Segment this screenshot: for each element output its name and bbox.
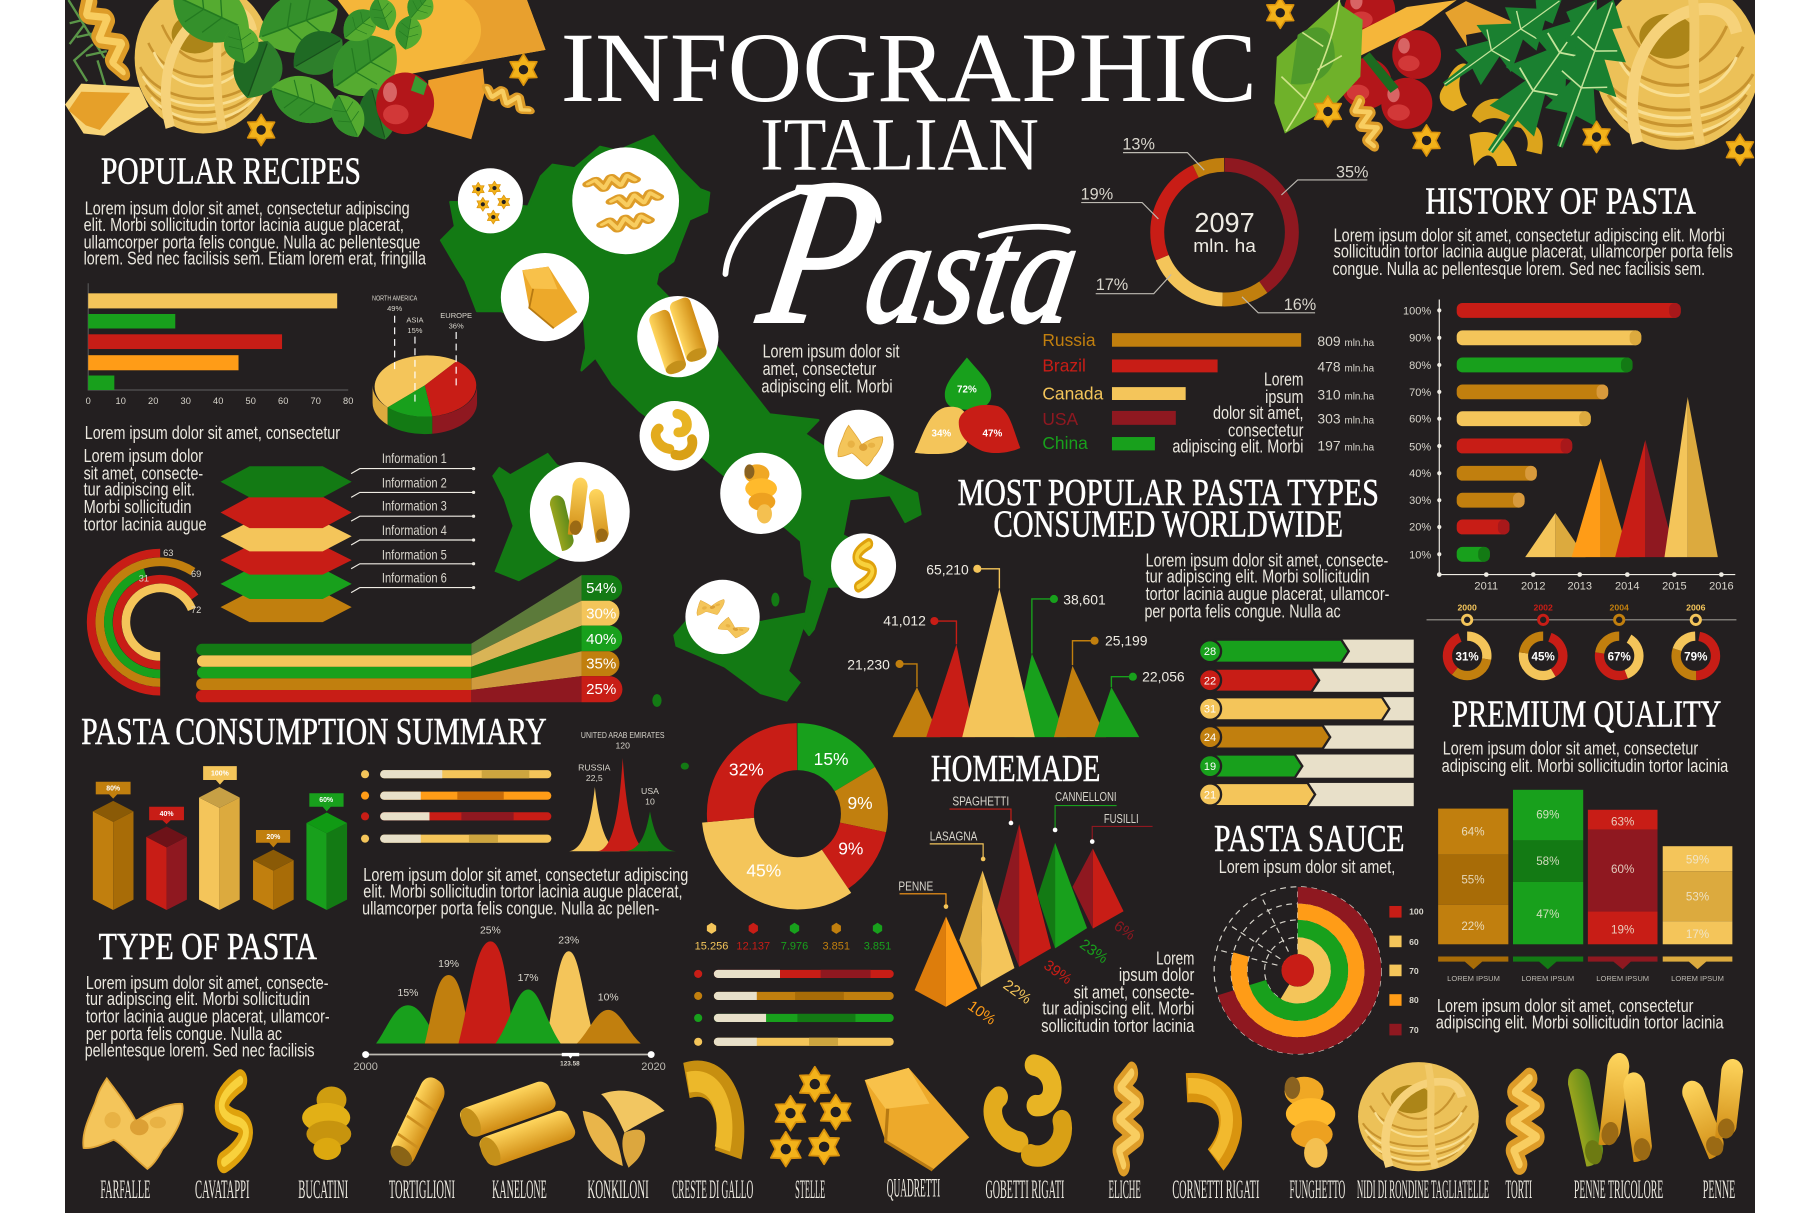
- row: pasta types with names: CAVATAPPI: [195, 1174, 250, 1204]
- item: kanelone: KANELONE: [492, 1174, 547, 1204]
- chart: arrow progress bars: 21: [1204, 790, 1216, 802]
- chart: mountain peaks: 38,601: [1063, 592, 1106, 608]
- chart: three leaves: 47%: [983, 428, 1003, 439]
- text: most popular body: tur adipiscing elit. Morbi sollicitudin: [1146, 566, 1370, 587]
- row: pasta types with names: FUNGHETTO: [1290, 1174, 1345, 1204]
- chart: country bars: 197 mln.ha: [1317, 437, 1375, 453]
- chart: country bars: dolor sit amet,: [1213, 402, 1303, 423]
- text: left column: tortor lacinia augue: [84, 513, 207, 534]
- heading: pasta consumption summary: PASTA CONSUMPTION SUMMARY: [81, 711, 547, 753]
- text: type of pasta body: tortor lacinia augue placerat, ullamcor-: [86, 1006, 330, 1027]
- title: Pasta script: Pasta: [746, 138, 1099, 367]
- chart: pyramids: LASAGNA: [930, 828, 978, 843]
- heading: most popular pasta types: MOST POPULAR PASTA TYPES: [958, 472, 1379, 514]
- chart: stripes to percent tabs: 30%: [586, 606, 616, 623]
- chart: big donut: 45%: [746, 860, 781, 880]
- chart: radial sauce: 70: [1409, 966, 1419, 976]
- chart: 3D pie: 15%: [407, 326, 423, 335]
- item: penne tricolore: [1565, 1049, 1663, 1204]
- heading: homemade: HOMEMADE: [931, 748, 1100, 790]
- chart: spike peaks: 120: [615, 741, 630, 751]
- circle: farfalle: [824, 410, 894, 479]
- text: history body: [1332, 224, 1733, 279]
- list: information labels: [351, 450, 475, 593]
- legend: hex dots and values: [695, 923, 891, 953]
- item: creste di gallo: [672, 1079, 753, 1204]
- chart: 3D pie: EUROPE: [440, 311, 472, 320]
- chart: stacked columns: LOREM IPSUM: [1596, 974, 1649, 983]
- chart: arrow progress bars: [1199, 640, 1414, 806]
- chart: stacked columns: 63%: [1611, 815, 1634, 828]
- chart: pyramids: PENNE: [898, 878, 933, 893]
- chart: stripes to percent tabs: 35%: [586, 656, 616, 673]
- item: stelle: STELLE: [795, 1174, 825, 1204]
- chart: 3D columns with tags: [93, 766, 347, 910]
- chart: mountain peaks: [847, 562, 1185, 737]
- legend: hex dots and values: 12.137: [736, 941, 770, 953]
- bar chart: recipes: 80: [343, 396, 353, 406]
- chart: history bars: 60%: [1409, 414, 1431, 426]
- chart: 2097 ring: 13%: [1122, 136, 1155, 154]
- text: consumption body: [362, 864, 688, 919]
- title: INFOGRAPHIC: INFOGRAPHIC: [561, 12, 1257, 123]
- chart: mountain peaks: 21,230: [847, 657, 890, 673]
- chart: pyramids: 10%: [964, 998, 999, 1029]
- item: eliche: [1108, 1073, 1141, 1204]
- chart: stacked columns: [1438, 790, 1732, 983]
- title: ITALIAN: ITALIAN: [760, 103, 1039, 186]
- chart: bell curves with timeline: 25%: [480, 925, 501, 936]
- text: under pasta: adipiscing elit. Morbi: [761, 375, 893, 396]
- heading: premium quality: PREMIUM QUALITY: [1452, 694, 1721, 736]
- item: penne: [1678, 1055, 1755, 1204]
- chart: 2097 ring: 16%: [1284, 296, 1316, 314]
- chart: spike peaks: 10: [645, 796, 655, 806]
- chart: year ring row: 79%: [1684, 650, 1707, 663]
- text: left column: Lorem ipsum dolor: [84, 445, 203, 466]
- chart: spike peaks: [568, 730, 678, 851]
- chart: year ring row: 67%: [1608, 650, 1631, 663]
- text: popular recipes body: ullamcorper porta felis congue. Nulla ac pellentesque: [84, 231, 420, 252]
- chart: history bars: 10%: [1409, 549, 1431, 561]
- chart: mountain peaks: 65,210: [926, 562, 969, 578]
- bar chart: recipes: 10: [116, 396, 126, 406]
- chart: bell curves with timeline: 2000: [353, 1061, 378, 1073]
- chart: three leaves: 72%: [957, 384, 977, 395]
- chart: stacked columns: LOREM IPSUM: [1671, 974, 1724, 983]
- bar chart: recipes: 0: [86, 396, 91, 406]
- chart: big donut: 32%: [729, 759, 764, 779]
- bar chart: recipes: 70: [311, 396, 321, 406]
- row: pasta types with names: CRESTE DI GALLO: [672, 1174, 753, 1204]
- item: penne: PENNE: [1703, 1174, 1735, 1204]
- legend: hex dots and values: 3.851: [864, 941, 891, 953]
- chart: year ring row: 2004: [1610, 603, 1629, 613]
- text: most popular body: Lorem ipsum dolor sit amet, consecte-: [1146, 549, 1388, 570]
- chart: history bars: 2011: [1474, 581, 1498, 593]
- chart: history bars: 2016: [1709, 581, 1734, 593]
- circle: kanelone: [637, 294, 718, 378]
- chart: stacked columns: 69%: [1536, 808, 1559, 821]
- chart: progress lines lower: [694, 970, 894, 1046]
- bar chart: recipes: 20: [148, 396, 158, 406]
- chart: history bars: 2013: [1567, 581, 1592, 593]
- chart: radial sauce: 70: [1409, 1025, 1419, 1035]
- chart: 3D pie: 36%: [449, 321, 464, 330]
- chart: history bars: 2015: [1662, 581, 1687, 593]
- heading: popular recipes: POPULAR RECIPES: [101, 150, 361, 192]
- legend: hex dots and values: 7.976: [781, 941, 808, 953]
- chart: country bars: Russia: [1042, 330, 1096, 350]
- item: quadretti: QUADRETTI: [887, 1173, 940, 1203]
- text: homemade body: ipsum dolor: [1119, 964, 1194, 985]
- chart: pyramids: [898, 789, 1153, 1029]
- chart: stacked columns: 60%: [1611, 863, 1634, 876]
- chart: bell curves with timeline: 2020: [641, 1061, 666, 1073]
- chart: stacked columns: 58%: [1536, 855, 1559, 868]
- map: Italy with pasta circles: [441, 136, 920, 770]
- chart: spike peaks: USA: [641, 786, 659, 796]
- chart: 3D pie: 49%: [387, 304, 402, 313]
- item: cavatappi: [195, 1080, 250, 1204]
- list: information labels: Information 1: [382, 450, 447, 466]
- text: homemade body: sollicitudin tortor lacinia: [1041, 1015, 1195, 1036]
- text: consumption body: elit. Morbi sollicitudin tortor lacinia augue placerat,: [363, 880, 682, 901]
- text: premium body: adipiscing elit. Morbi sollicitudin tortor lacinia: [1442, 755, 1729, 776]
- chart: stacked columns: 59%: [1686, 854, 1709, 867]
- circle: farfalle pair: [685, 580, 760, 654]
- chart: year ring row: 2002: [1534, 603, 1553, 613]
- chart: history bars: 2014: [1615, 581, 1640, 593]
- chart: pyramids: FUSILLI: [1104, 811, 1139, 826]
- chart: rainbow arcs: [91, 548, 201, 691]
- chart: three leaves: 34%: [931, 428, 951, 439]
- heading: most popular pasta types: CONSUMED WORLDWIDE: [994, 503, 1343, 545]
- chart: hexagon stack: [221, 466, 352, 622]
- chart: rainbow arcs: 69: [191, 569, 201, 579]
- chart: bell curves with timeline: 23%: [558, 936, 579, 947]
- row: pasta types with names: BUCATINI: [298, 1174, 348, 1204]
- chart: bell curves with timeline: 15%: [398, 988, 418, 999]
- chart: arrow progress bars: 22: [1204, 675, 1216, 687]
- chart: pyramids: SPAGHETTI: [952, 794, 1009, 809]
- heading: pasta sauce: PASTA SAUCE: [1214, 818, 1404, 860]
- chart: pyramids: CANNELLONI: [1055, 789, 1117, 804]
- text: most popular body: per porta felis congue. Nulla ac: [1144, 601, 1341, 622]
- text: under pasta: Lorem ipsum dolor sit: [763, 341, 900, 362]
- chart: year ring row: 45%: [1532, 650, 1555, 663]
- text: premium footer: adipiscing elit. Morbi sollicitudin tortor lacinia: [1436, 1011, 1724, 1032]
- chart: country bars: 310 mln.ha: [1317, 386, 1375, 402]
- bar chart: recipes: 50: [246, 396, 256, 406]
- chart: history bars: 30%: [1409, 495, 1431, 507]
- chart: history bars: [1403, 299, 1735, 593]
- text: type of pasta body: tur adipiscing elit. Morbi sollicitudin: [86, 988, 310, 1009]
- item: tortiglioni: [387, 1072, 455, 1204]
- text: homemade body: [1041, 948, 1195, 1036]
- chart: pyramids: 6%: [1111, 918, 1138, 944]
- text: type of pasta body: per porta felis congue. Nulla ac: [86, 1023, 282, 1044]
- chart: big donut: 9%: [838, 838, 863, 858]
- item: cornetti rigati: [1172, 1086, 1259, 1204]
- chart: stacked columns: 47%: [1536, 908, 1559, 921]
- chart: rainbow arcs: 72: [191, 605, 201, 615]
- text: under pasta: amet, consectetur: [763, 358, 876, 379]
- chart: bell curves with timeline: [353, 925, 666, 1073]
- chart: country bars: adipiscing elit. Morbi: [1172, 436, 1303, 457]
- chart: 2097 ring: 17%: [1096, 276, 1128, 294]
- decoration: top-right pasta and herbs: [1267, 0, 1760, 172]
- chart: pyramids: 22%: [1000, 977, 1034, 1008]
- chart: 3D columns with tags: 100%: [211, 770, 229, 777]
- chart: country bars: 478 mln.ha: [1317, 358, 1375, 374]
- row: pasta types with names: TORTIGLIONI: [389, 1174, 455, 1204]
- text: type of pasta body: pellentesque lorem. Sed nec facilisis: [85, 1039, 315, 1060]
- chart: progress lines upper: [361, 770, 551, 843]
- circle: penne tricolore: [530, 462, 630, 562]
- chart: 3D columns with tags: 60%: [319, 797, 333, 804]
- chart: spike peaks: UNITED ARAB EMIRATES: [581, 730, 665, 740]
- item: bucatini: [298, 1086, 351, 1204]
- row: pasta types with names: CORNETTI RIGATI: [1172, 1174, 1259, 1204]
- heading: type of pasta: TYPE OF PASTA: [99, 926, 317, 968]
- chart: history bars: 70%: [1409, 387, 1431, 399]
- chart: country bars: Canada: [1042, 383, 1104, 403]
- text: left column: Morbi sollicitudin: [84, 496, 192, 517]
- chart: arrow progress bars: 24: [1204, 732, 1216, 744]
- text: popular recipes body: lorem. Sed nec facilisis sem. Etiam lorem erat, fringilla: [84, 248, 426, 269]
- circle: fusilli: [572, 147, 679, 254]
- item: nidi di rondine tagliatelle: [1357, 1062, 1489, 1204]
- text: consumption body: Lorem ipsum dolor sit amet, consectetur adipiscing: [363, 864, 688, 885]
- text: type of pasta body: Lorem ipsum dolor sit amet, consecte-: [86, 972, 328, 993]
- circle: cavatappi: [831, 533, 896, 598]
- chart: 2097 ring: 2097: [1194, 207, 1255, 238]
- text: pasta sauce body: Lorem ipsum dolor sit amet,: [1219, 856, 1395, 877]
- chart: country bars: ipsum: [1265, 386, 1303, 407]
- chart: stacked columns: 17%: [1686, 928, 1709, 941]
- chart: 2097 ring: 35%: [1336, 164, 1369, 182]
- chart: year ring row: 2000: [1457, 603, 1477, 613]
- chart: 2097 ring: 19%: [1081, 186, 1113, 204]
- item: farfalle: [83, 1078, 183, 1204]
- item: farfalle: FARFALLE: [100, 1174, 150, 1204]
- chart: stacked columns: 55%: [1461, 873, 1485, 886]
- row: pasta types with names: PENNE TRICOLORE: [1574, 1174, 1663, 1204]
- chart: history bars: 20%: [1409, 521, 1431, 533]
- text: left column: sit amet, consecte-: [84, 462, 203, 483]
- text: homemade body: Lorem: [1156, 948, 1194, 969]
- chart: year ring row: [1427, 603, 1736, 676]
- text: premium body: [1442, 737, 1729, 776]
- chart: radial sauce: [1214, 887, 1424, 1054]
- text: popular recipes body: elit. Morbi sollicitudin tortor lacinia augue placerat,: [84, 214, 404, 235]
- chart: stacked columns: 64%: [1461, 826, 1485, 839]
- chart: radial sauce: 80: [1409, 995, 1419, 1005]
- chart: stripes to percent tabs: 40%: [586, 631, 616, 648]
- text: history body: congue. Nulla ac pellentesque lorem. Sed nec facilisis sem.: [1332, 258, 1705, 279]
- text: consumption body: ullamcorper porta felis congue. Nulla ac pellen-: [362, 898, 659, 919]
- chart: history bars: 50%: [1409, 441, 1431, 453]
- chart: country bars: China: [1042, 433, 1088, 453]
- chart: country bars: consectetur: [1228, 419, 1303, 440]
- text: popular recipes body: Lorem ipsum dolor sit amet, consectetur adipiscing: [85, 198, 410, 219]
- chart: radial sauce: 60: [1409, 937, 1419, 947]
- legend: hex dots and values: 3.851: [823, 941, 850, 953]
- chart: 3D pie: NORTH AMERICA: [372, 294, 418, 303]
- chart: stripes to percent tabs: 25%: [586, 681, 616, 698]
- text: under pasta: [761, 341, 900, 396]
- list: information labels: Information 4: [382, 522, 447, 538]
- row: pasta types with names: [83, 1049, 1755, 1204]
- chart: bell curves with timeline: 123.58: [560, 1061, 580, 1068]
- chart: history bars: 90%: [1409, 332, 1431, 344]
- item: konkiloni: KONKILONI: [587, 1174, 649, 1204]
- chart: pyramids: 39%: [1040, 957, 1075, 988]
- row: pasta types with names: TORTI: [1505, 1174, 1532, 1204]
- chart: spike peaks: 22,5: [586, 773, 603, 783]
- chart: mountain peaks: 22,056: [1142, 668, 1185, 684]
- chart: arrow progress bars: 19: [1204, 761, 1216, 773]
- list: information labels: Information 2: [382, 475, 447, 491]
- chart: stripes to percent tabs: [196, 575, 622, 702]
- chart: country bars: Lorem: [1264, 368, 1303, 389]
- list: information labels: Information 5: [382, 546, 447, 562]
- text: left column: [84, 445, 207, 534]
- circle: quadretti: [501, 253, 589, 341]
- item: funghetto: [1285, 1077, 1345, 1204]
- chart: radial sauce: 100: [1409, 907, 1424, 917]
- item: kanelone: [456, 1077, 578, 1204]
- text: homemade body: tur adipiscing elit. Morbi: [1042, 998, 1194, 1019]
- text: left column: tur adipiscing elit.: [84, 479, 195, 500]
- chart: bell curves with timeline: 19%: [438, 959, 459, 970]
- bar chart: recipes: 40: [213, 396, 223, 406]
- chart: 3D columns with tags: 20%: [266, 834, 280, 841]
- row: pasta types with names: NIDI DI RONDINE TAGLIATELLE: [1357, 1174, 1489, 1204]
- list: information labels: Information 6: [382, 570, 447, 586]
- chart: bell curves with timeline: 10%: [598, 993, 619, 1004]
- text: type of pasta body: [85, 972, 330, 1060]
- text: premium footer: Lorem ipsum dolor sit amet, consectetur: [1437, 995, 1693, 1016]
- text: premium body: Lorem ipsum dolor sit amet, consectetur: [1443, 737, 1698, 758]
- chart: mountain peaks: 41,012: [883, 613, 926, 629]
- chart: 3D pie: [372, 294, 477, 434]
- heading: most popular pasta types: [958, 472, 1379, 545]
- item: torti: [1505, 1078, 1537, 1204]
- chart: arrow progress bars: 31: [1204, 704, 1216, 716]
- chart: three leaves: [915, 358, 1020, 454]
- item: gobetti rigati: [985, 1065, 1064, 1204]
- row: pasta types with names: GOBETTI RIGATI: [985, 1174, 1064, 1204]
- chart: year ring row: 31%: [1456, 650, 1479, 663]
- chart: history bars: 80%: [1409, 360, 1431, 372]
- bar chart: recipes: [86, 283, 353, 406]
- decoration: top-left pasta and herbs: [65, 0, 546, 146]
- heading: history of pasta: HISTORY OF PASTA: [1425, 181, 1696, 223]
- chart: big donut: [728, 744, 873, 883]
- chart: stacked columns: 19%: [1611, 923, 1634, 936]
- item: stelle: [771, 1067, 851, 1204]
- text: most popular body: [1144, 549, 1389, 622]
- chart: stacked columns: LOREM IPSUM: [1521, 974, 1574, 983]
- chart: big donut: 15%: [814, 749, 848, 769]
- chart: arrow progress bars: 28: [1204, 646, 1216, 658]
- chart: year ring row: 2006: [1686, 603, 1706, 613]
- chart: bell curves with timeline: 17%: [518, 973, 539, 984]
- chart: pyramids: 23%: [1076, 936, 1111, 967]
- chart: stripes to percent tabs: 54%: [586, 580, 616, 597]
- chart: spike peaks: RUSSIA: [578, 763, 611, 773]
- chart: rainbow arcs: 63: [163, 548, 173, 558]
- text: most popular body: tortor lacinia augue placerat, ullamcor-: [1146, 583, 1389, 604]
- chart: 3D pie: ASIA: [406, 316, 425, 325]
- legend: hex dots and values: 15.256: [695, 941, 728, 953]
- chart: stacked columns: 53%: [1686, 891, 1709, 904]
- chart: 2097 ring: mln. ha: [1193, 235, 1257, 256]
- chart: stacked columns: 22%: [1461, 920, 1485, 933]
- list: information labels: Information 3: [382, 498, 447, 514]
- item: quadretti: [865, 1068, 969, 1203]
- chart: country bars: 303 mln.ha: [1317, 411, 1375, 427]
- chart: country bars: Brazil: [1042, 355, 1086, 375]
- row: pasta types with names: ELICHE: [1108, 1174, 1141, 1204]
- chart: 3D columns with tags: 80%: [106, 785, 120, 792]
- bar chart: recipes: 60: [278, 396, 288, 406]
- chart: history bars: 100%: [1403, 306, 1431, 318]
- bar chart: recipes: 30: [181, 396, 191, 406]
- chart: 3D columns with tags: 40%: [160, 811, 174, 818]
- circle: gobetti: [640, 401, 709, 471]
- chart: country bars: 809 mln.ha: [1317, 333, 1375, 349]
- text: popular recipes body: [84, 198, 426, 269]
- circle: funghetto: [720, 453, 801, 534]
- chart: stacked columns: LOREM IPSUM: [1447, 974, 1500, 983]
- item: konkiloni: [583, 1091, 665, 1204]
- circle: stelle: [458, 168, 523, 233]
- chart: big donut: 9%: [848, 793, 873, 813]
- text: short line: Lorem ipsum dolor sit amet, consectetur: [85, 422, 340, 443]
- chart: history bars: 40%: [1409, 468, 1431, 480]
- text: premium footer: [1436, 995, 1724, 1032]
- chart: country bars: [1042, 330, 1375, 457]
- chart: 2097 ring: [1081, 136, 1369, 314]
- text: homemade body: sit amet, consecte-: [1074, 981, 1194, 1002]
- chart: country bars: USA: [1042, 409, 1079, 429]
- chart: history bars: 2012: [1521, 581, 1546, 593]
- chart: mountain peaks: 25,199: [1105, 632, 1148, 648]
- chart: rainbow arcs: 31: [139, 574, 149, 584]
